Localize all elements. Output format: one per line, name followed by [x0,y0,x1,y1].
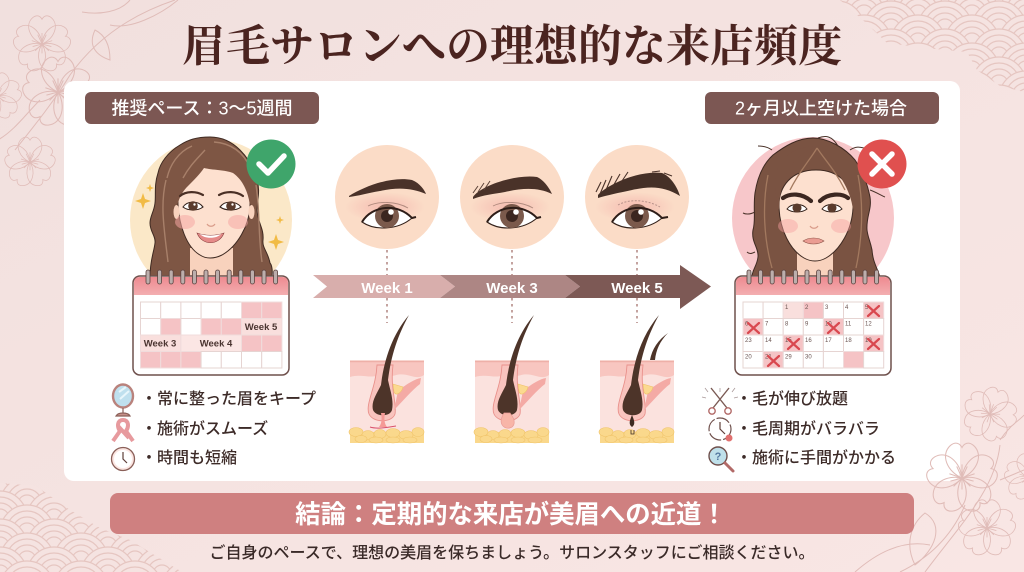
calendar: missed visits: 9 [805,322,809,328]
icon: clock with alert [709,418,732,442]
text: always tidy brows: ・常に整った眉をキープ [141,390,316,408]
icon: mirror [113,384,133,416]
calendar: missed visits: 5 [865,305,869,311]
text: hair cycle out of sync: ・毛周期がバラバラ [736,419,880,438]
calendar: missed visits: 30 [805,354,812,360]
timeline arrow [313,265,711,309]
text: smooth treatment: ・施術がスムーズ [141,419,268,438]
illustration: unkempt woman with overgrown brows [732,137,894,299]
calendar: missed visits: 2 [805,305,809,311]
icon: scissors [702,388,738,414]
arrow segment: week 1 [313,275,455,298]
hair diagram: week 5 [599,315,674,443]
eye circle: week 5 [585,145,689,249]
icon: sparkles [135,184,284,250]
text: shorter time: ・時間も短縮 [141,449,237,467]
calendar: missed visits: 14 [765,338,772,344]
calendar: missed visits: 10 [825,322,832,328]
icon: green check badge [246,140,296,188]
calendar: missed visits: 18 [845,338,852,344]
icon: red cross badge [858,140,906,188]
decoration: cherry blossoms bottom right [855,379,1024,572]
icon: ribbon [113,420,133,441]
heading: over two months: 2ヶ月以上空けた場合 [735,98,907,118]
calendar: missed visits: 12 [865,322,872,328]
arrow segment: week 3 [440,275,580,298]
conclusion banner [110,493,914,534]
calendar: regular visits: Week 5 [245,322,278,333]
arrow segment: week 5: Week 5 [611,280,663,297]
calendar: missed visits: 17 [825,338,832,344]
hair diagram: week 3 [474,315,549,443]
calendar: missed visits: 29 [785,354,792,360]
calendar: missed visits: 15 [785,338,792,344]
calendar: missed visits: 3 [825,305,829,311]
calendar: missed visits: 11 [845,322,852,328]
calendar: missed visits: 20 [745,354,752,360]
illustration: happy woman with tidy brows [130,137,292,301]
calendar: missed visits: 19 [865,338,872,344]
conclusion banner: 結論：定期的な来店が美眉への近道！ [295,500,727,529]
calendar: regular visits [133,270,289,375]
calendar: missed visits: 16 [805,338,812,344]
heading: over two months [705,92,939,124]
calendar: missed visits: 1 [785,305,789,311]
closing message: ご自身のペースで、理想の美眉を保ちましょう。サロンスタッフにご相談ください。 [210,544,814,562]
arrow segment: week 5 [565,265,711,309]
arrow segment: week 1: Week 1 [361,280,413,297]
calendar: missed visits: 23 [745,338,752,344]
hair diagram: week 1 [349,315,424,443]
calendar: regular visits: Week 3 [144,338,176,350]
icon: magnifier [709,447,733,471]
calendar: missed visits: 7 [765,322,769,328]
calendar: missed visits [735,270,891,375]
pattern: seigaiha waves top right [838,0,1024,92]
icon: clock [112,448,134,470]
text: hair grows unchecked: ・毛が伸び放題 [736,389,848,408]
eye circle: week 3 [460,145,564,249]
panel: main white card [64,81,960,481]
calendar: missed visits: 21 [765,354,772,360]
heading: recommended pace [85,92,319,124]
calendar: missed visits: 8 [785,322,789,328]
icon: magnifier: ? [715,451,722,463]
dotted guide lines [387,250,637,323]
pattern: seigaiha waves bottom left [0,482,184,572]
eye circle: week 1 [335,145,439,249]
calendar: missed visits: 4 [845,305,849,311]
decoration: cherry blossoms top left [0,0,178,189]
calendar: regular visits: Week 4 [200,338,233,350]
text: takes more effort: ・施術に手間がかかる [736,448,896,467]
title: 眉毛サロンへの理想的な来店頻度 [182,22,842,71]
arrow segment: week 3: Week 3 [486,280,538,297]
calendar: missed visits: 6 [745,322,749,328]
heading: recommended pace: 推奨ペース：3〜5週間 [111,98,293,118]
